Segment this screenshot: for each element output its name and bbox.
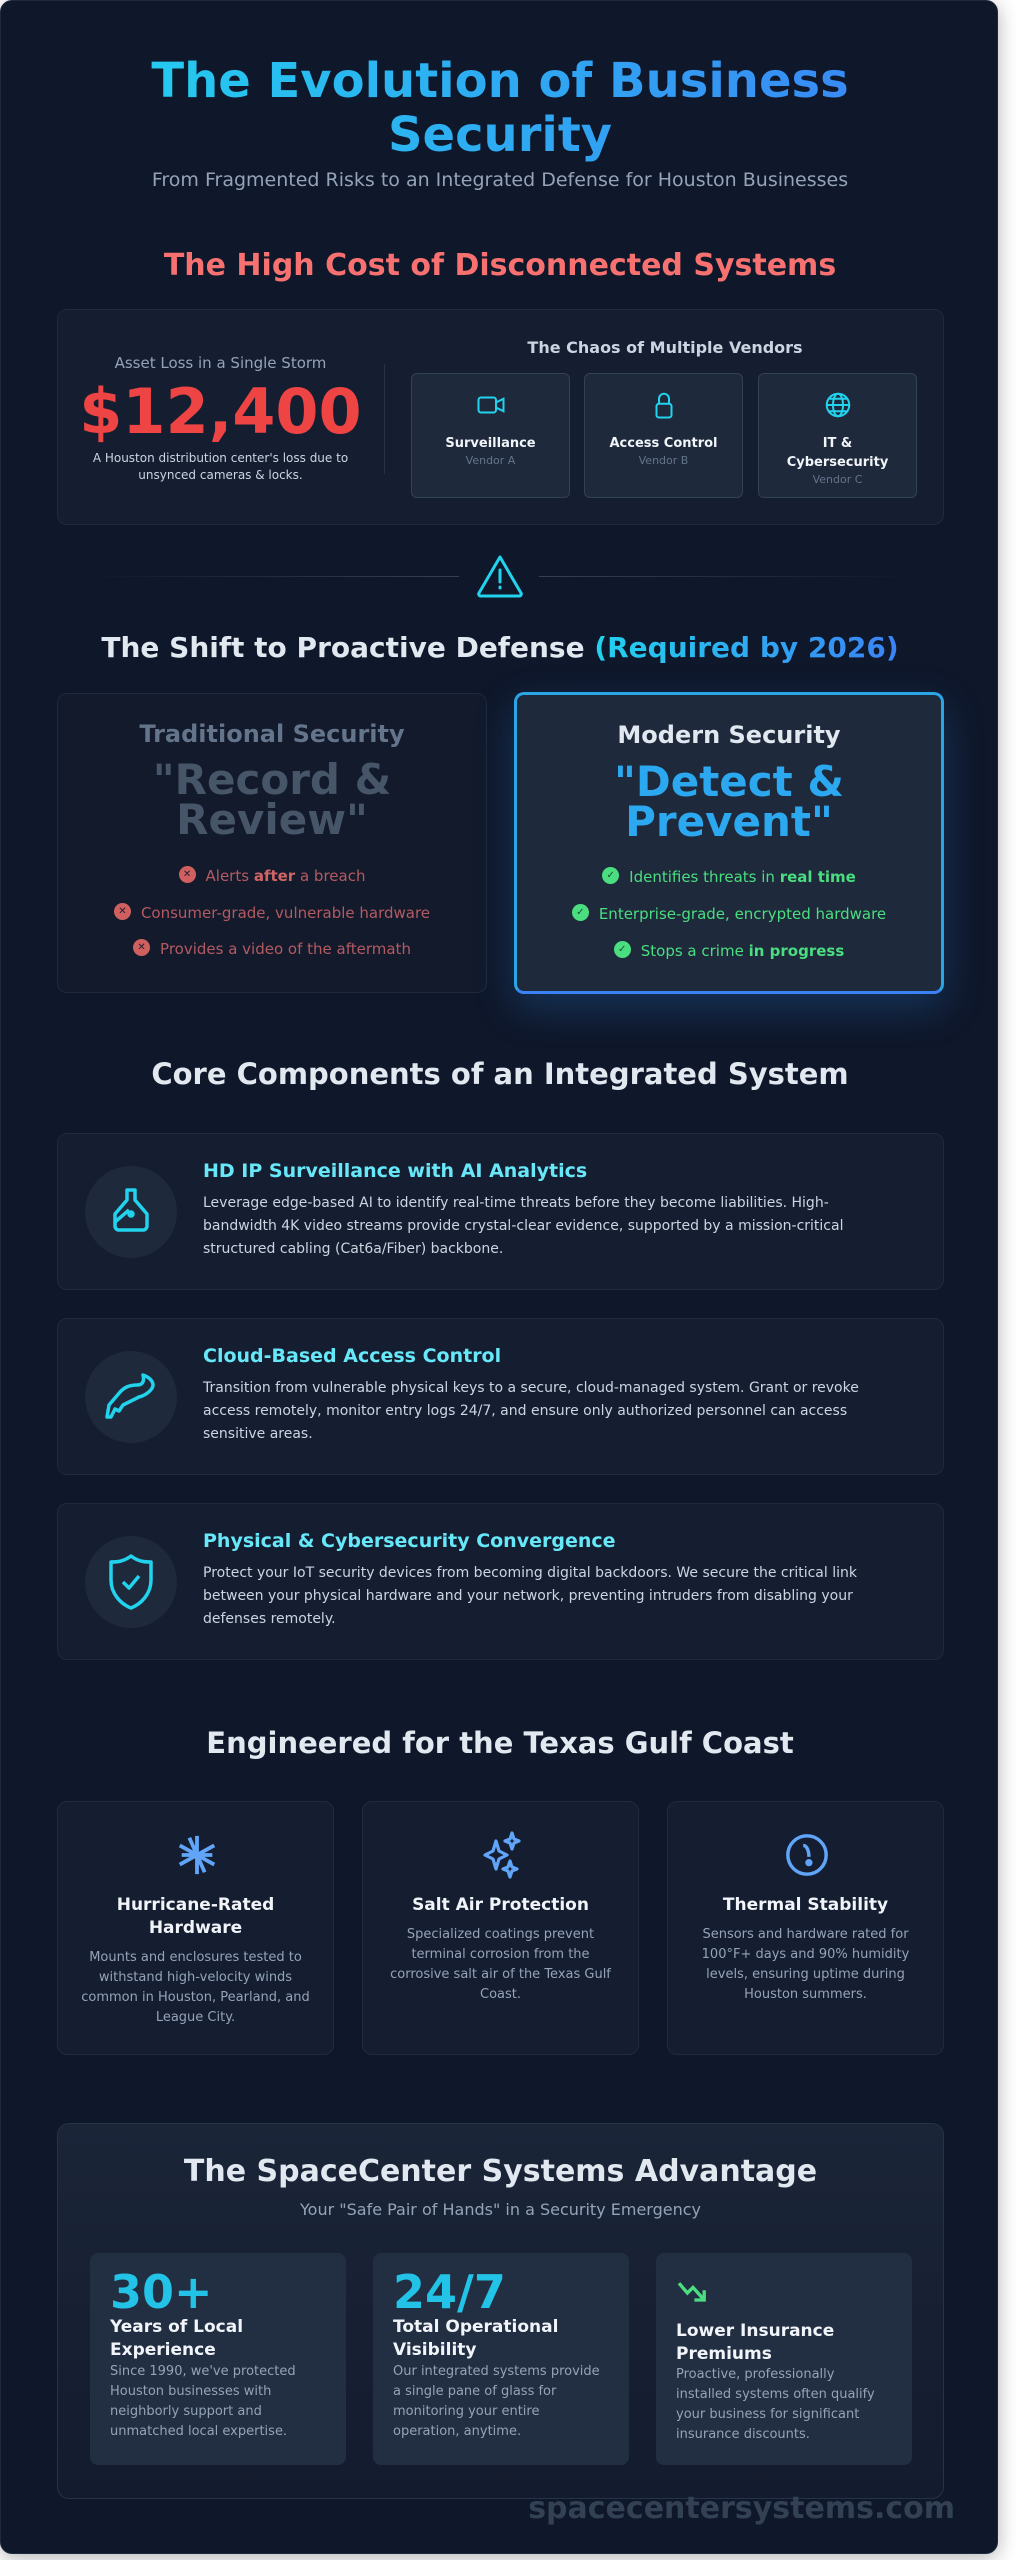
heading: shift: The Shift to Proactive Defense (Required by 2026) — [101, 631, 899, 664]
vendor: access control: Vendor B — [639, 454, 688, 467]
component: surveillance: Leverage edge-based AI to identify real-time threats before they become liabilities. High-bandwidth 4K video streams provide crystal-clear evidence, supported by a mission-critical structured cabling (Cat6a/Fiber) backbone. — [203, 1195, 843, 1257]
component: surveillance — [57, 1133, 944, 1290]
heading: chaos of vendors: The Chaos of Multiple Vendors — [527, 338, 803, 357]
card: salt air: Specialized coatings prevent terminal corrosion from the corrosive salt air of the Texas Gulf Coast. — [390, 1927, 611, 2002]
card: salt air — [362, 1801, 639, 2055]
panel: advantage: The SpaceCenter Systems Advantage — [184, 2154, 817, 2189]
panel: traditional: Consumer-grade, vulnerable hardware — [141, 904, 430, 922]
icon: warning divider — [150, 555, 850, 598]
panel: traditional: Provides a video of the aftermath — [160, 940, 411, 958]
subtitle: From Fragmented Risks to an Integrated Defense for Houston Businesses — [152, 169, 848, 191]
component: surveillance: HD IP Surveillance with AI Analytics — [203, 1160, 587, 1182]
stat: 30+: Since 1990, we've protected Houston businesses with neighborly support and unmatched local expertise. — [110, 2364, 296, 2439]
panel: traditional — [57, 693, 487, 993]
card: hurricane: Hardware — [149, 1918, 242, 1938]
stat: insurance — [656, 2253, 912, 2465]
panel: modern: Stops a crime in progress — [641, 942, 844, 960]
card: salt air: Salt Air Protection — [412, 1895, 589, 1915]
stat: insurance: Premiums — [676, 2344, 772, 2364]
panel: modern: "Detect & — [614, 757, 844, 806]
panel: disconnected systems — [57, 309, 944, 525]
stat: 30+ — [90, 2253, 346, 2465]
vendor: IT: Vendor C — [813, 473, 862, 486]
card: thermal: Thermal Stability — [723, 1895, 888, 1915]
panel: modern — [514, 692, 944, 994]
vendor: surveillance: Vendor A — [466, 454, 515, 467]
card: hurricane: Hurricane-Rated — [117, 1895, 274, 1915]
stat: asset loss: $12,400 — [79, 375, 362, 448]
panel: modern: Identifies threats in real time — [629, 868, 856, 886]
panel: modern: ✓ — [606, 870, 615, 881]
component: convergence — [57, 1503, 944, 1660]
card: hurricane — [57, 1801, 334, 2055]
heading: gulf coast: Engineered for the Texas Gulf Coast — [206, 1726, 794, 1760]
heading: high cost: The High Cost of Disconnected Systems — [164, 248, 836, 283]
vendor: IT — [758, 373, 917, 498]
panel: advantage — [57, 2123, 944, 2499]
component: access control: Transition from vulnerable physical keys to a secure, cloud-managed system. Grant or revoke access remotely, monitor entry logs 24/7, and ensure only authorized personnel can access sensitive areas. — [203, 1380, 859, 1442]
panel: advantage: Your "Safe Pair of Hands" in a Security Emergency — [300, 2200, 701, 2219]
panel: traditional: ✕ — [137, 942, 146, 953]
stat: 24/7: Total Operational — [393, 2317, 558, 2337]
stat: 24/7: Visibility — [393, 2340, 476, 2360]
panel: modern: ✓ — [576, 907, 585, 918]
stat: 30+: Experience — [110, 2340, 216, 2360]
card: thermal: Sensors and hardware rated for 100°F+ days and 90% humidity levels, ensuring uptime during Houston summers. — [702, 1927, 909, 2002]
component: access control: Cloud-Based Access Control — [203, 1345, 501, 1367]
footer url: spacecentersystems.com — [528, 2491, 955, 2526]
panel: traditional: Traditional Security — [139, 720, 405, 748]
panel: modern: Prevent" — [625, 797, 833, 846]
stat: insurance: Proactive, professionally installed systems often qualify your business for significant insurance discounts. — [676, 2367, 875, 2442]
stat: asset loss: A Houston distribution center's loss due to — [93, 451, 348, 465]
panel: modern: Modern Security — [617, 721, 841, 749]
panel: modern: Enterprise-grade, encrypted hardware — [599, 905, 886, 923]
stat: 24/7: Our integrated systems provide a single pane of glass for monitoring your entire operation, anytime. — [393, 2364, 600, 2439]
panel: traditional: Alerts after a breach — [206, 867, 365, 885]
stat: insurance: Lower Insurance — [676, 2321, 834, 2341]
stat: 30+: Years of Local — [110, 2317, 243, 2337]
vendor: IT: Cybersecurity — [787, 455, 888, 470]
panel: traditional: "Record & — [153, 755, 391, 804]
vendor: access control — [584, 373, 743, 498]
heading: core components: Core Components of an Integrated System — [151, 1057, 849, 1091]
component: access control — [57, 1318, 944, 1475]
vendor: IT: IT & — [823, 436, 852, 451]
title: The Evolution of Business Security — [151, 53, 849, 163]
stat: 24/7: 24/7 — [393, 2265, 506, 2319]
stat: 30+: 30+ — [110, 2265, 213, 2319]
panel: traditional: Review" — [176, 795, 368, 844]
stat: 24/7 — [373, 2253, 629, 2465]
panel: traditional: ✕ — [183, 869, 191, 880]
component: convergence: Physical & Cybersecurity Convergence — [203, 1530, 616, 1552]
stat: asset loss: unsynced cameras & locks. — [138, 468, 303, 482]
panel: modern: ✓ — [618, 944, 626, 955]
stat: asset loss — [79, 354, 362, 482]
stat: asset loss: Asset Loss in a Single Storm — [115, 354, 326, 372]
card: thermal — [667, 1801, 944, 2055]
vendor: access control: Access Control — [609, 436, 718, 451]
component: convergence: Protect your IoT security devices from becoming digital backdoors. We secure the critical link between your physical hardware and your network, preventing intruders from disabling your defenses remotely. — [203, 1565, 857, 1627]
vendor: surveillance: Surveillance — [445, 436, 536, 451]
vendor: surveillance — [411, 373, 570, 498]
card: hurricane: Mounts and enclosures tested to withstand high-velocity winds common in Houston, Pearland, and League City. — [81, 1950, 310, 2025]
panel: traditional: ✕ — [118, 906, 127, 917]
